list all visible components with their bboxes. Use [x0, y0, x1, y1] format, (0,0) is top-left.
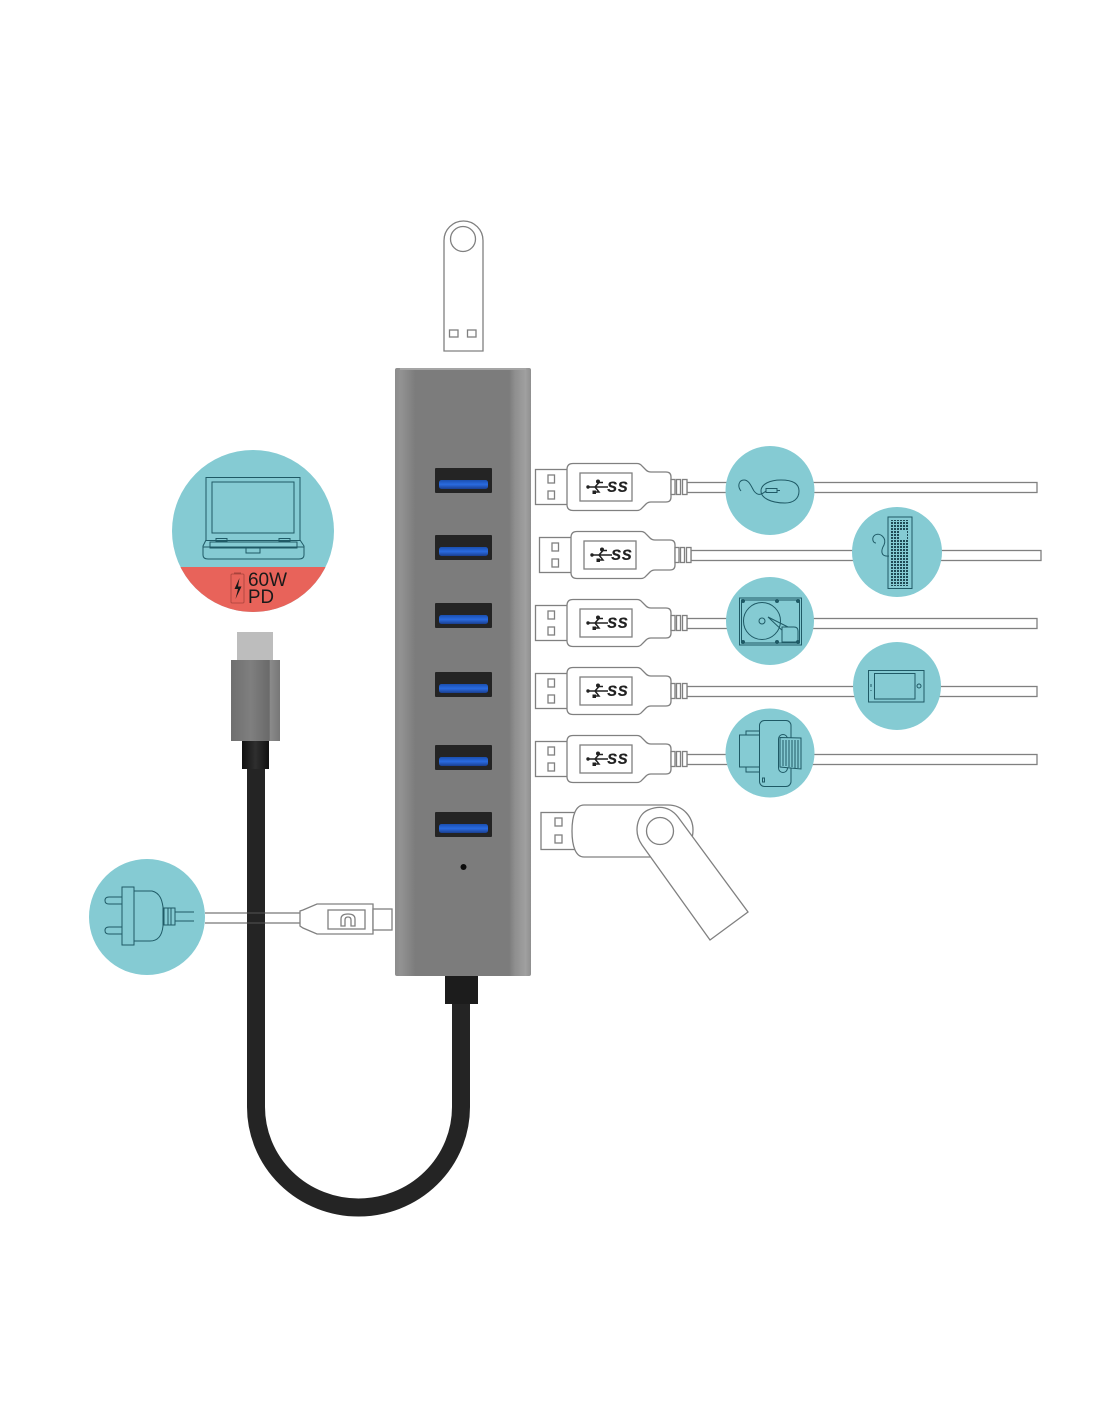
circle: printer [726, 708, 814, 798]
USB plug and cable row 4 [536, 668, 1037, 714]
USB plug and cable row 3 [536, 600, 1037, 646]
black cable from hub to USB-C plug [242, 741, 478, 1208]
circle: keyboard [852, 507, 942, 597]
USB plug and cable row 1 [536, 464, 1037, 510]
USB port 4 [435, 672, 492, 697]
text: 60W PD [248, 570, 287, 608]
indicator LED [460, 864, 466, 870]
USB plug and cable row 4: ss [607, 680, 628, 701]
hub body [395, 368, 531, 976]
USB port 3 [435, 603, 492, 628]
circle: hard drive [726, 577, 814, 665]
USB plug and cable row 5 [536, 736, 1037, 782]
icon: hard drive [740, 598, 802, 645]
USB port 2 [435, 535, 492, 560]
USB-C plug [231, 632, 280, 741]
USB port 6 [435, 812, 492, 837]
icon: printer [740, 720, 801, 786]
icon: power plug [105, 887, 194, 945]
circle: laptop with 60W PD [172, 450, 334, 613]
swivel flash drive [541, 805, 748, 940]
icon: keyboard [873, 517, 912, 588]
USB plug and cable row 1: ss [607, 476, 628, 497]
USB plug and cable row 3: ss [607, 612, 628, 633]
USB-C charging cable and plug [205, 904, 392, 934]
icon: tablet [868, 670, 924, 702]
icon: mouse [739, 480, 799, 503]
USB port 5 [435, 745, 492, 770]
USB plug and cable row 2: ss [611, 544, 632, 565]
text: 60W PD: PD [248, 587, 274, 608]
text: 60W PD: 60W [248, 570, 287, 591]
circle: mouse [726, 446, 814, 535]
USB plug and cable row 5: ss [607, 748, 628, 769]
icon: laptop [203, 478, 304, 559]
circle: tablet [853, 642, 941, 730]
USB port 1 [435, 468, 492, 493]
icon: battery with bolt [231, 572, 244, 603]
circle: power plug [89, 859, 205, 975]
flash drive above hub [444, 221, 483, 351]
USB plug and cable row 2 [540, 532, 1041, 578]
